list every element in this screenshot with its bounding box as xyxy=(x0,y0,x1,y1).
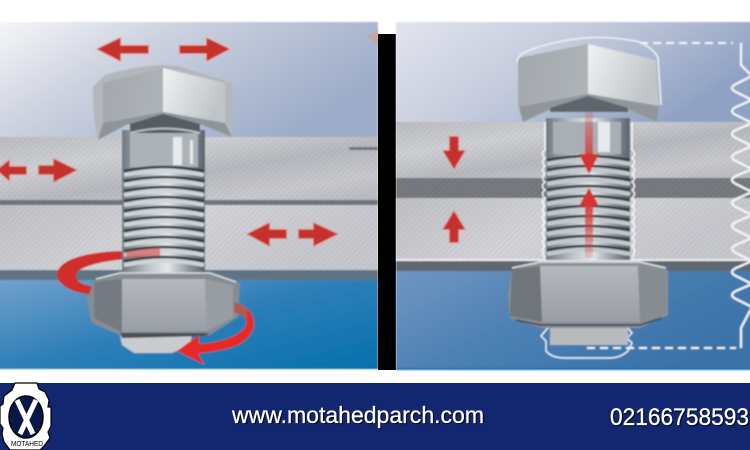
crossed wrenches xyxy=(17,400,36,434)
arrow: upper plate left xyxy=(0,159,27,182)
left nut xyxy=(87,273,240,353)
nut protruding end xyxy=(541,327,632,358)
spring outline xyxy=(732,43,750,348)
left upper plate xyxy=(0,137,378,200)
arrow: head left xyxy=(96,37,149,62)
bolt head xyxy=(518,44,660,122)
bolt shank xyxy=(122,130,205,273)
right nut xyxy=(508,262,668,358)
left lower plate xyxy=(0,205,378,270)
dashed guide bottom xyxy=(587,347,736,349)
rotation arrow back xyxy=(57,250,150,295)
arrow: plate press down xyxy=(442,136,466,170)
panel: left bolt loosening scene xyxy=(0,22,378,369)
gear hub xyxy=(9,396,43,438)
left bolt xyxy=(93,65,233,273)
arrow: upper plate right xyxy=(38,158,78,183)
head outline xyxy=(517,38,661,105)
left blue base xyxy=(0,270,378,369)
arrow: head right xyxy=(179,37,231,62)
right bolt xyxy=(517,38,661,260)
footer background xyxy=(0,383,750,450)
arrow: bolt shank up xyxy=(579,188,599,258)
arrow: plate press up xyxy=(442,210,466,243)
threads xyxy=(547,156,630,254)
nut body xyxy=(87,273,240,335)
bolt shank xyxy=(546,118,630,260)
divider xyxy=(378,34,396,370)
dashed guide top xyxy=(640,42,733,44)
white outline threads xyxy=(542,122,545,258)
right plate shadow xyxy=(396,261,750,271)
bolt head xyxy=(93,65,233,140)
bolt collar xyxy=(130,133,198,167)
footer band: www.motahedparch.com xyxy=(231,402,484,428)
footer band xyxy=(0,383,750,450)
website text: www.motahedparch.com xyxy=(232,403,485,429)
left plate shadow xyxy=(0,270,378,280)
rotation arrow through threads xyxy=(126,247,160,258)
icon: motahed gear logo xyxy=(0,383,51,450)
rotation arrow front xyxy=(177,302,254,365)
left background sky xyxy=(0,22,378,138)
right blue base xyxy=(396,261,750,369)
right clamp band xyxy=(396,178,750,198)
left plate small notch xyxy=(349,147,378,150)
arrow: bolt shank down xyxy=(579,112,599,174)
left plate gap xyxy=(0,200,378,205)
arrow: lower plate left xyxy=(246,222,287,247)
nut body xyxy=(508,262,668,328)
threads xyxy=(124,167,204,265)
nut underside xyxy=(120,335,192,353)
right lower plate xyxy=(396,198,750,260)
logo text: MOTAHED xyxy=(11,441,43,448)
divider top mark xyxy=(367,30,378,46)
panel: right bolt clamped scene xyxy=(396,22,750,370)
right upper plate xyxy=(396,122,750,178)
right background sky xyxy=(396,22,750,123)
gear teeth xyxy=(0,383,51,450)
arrow: lower plate right xyxy=(298,222,339,247)
